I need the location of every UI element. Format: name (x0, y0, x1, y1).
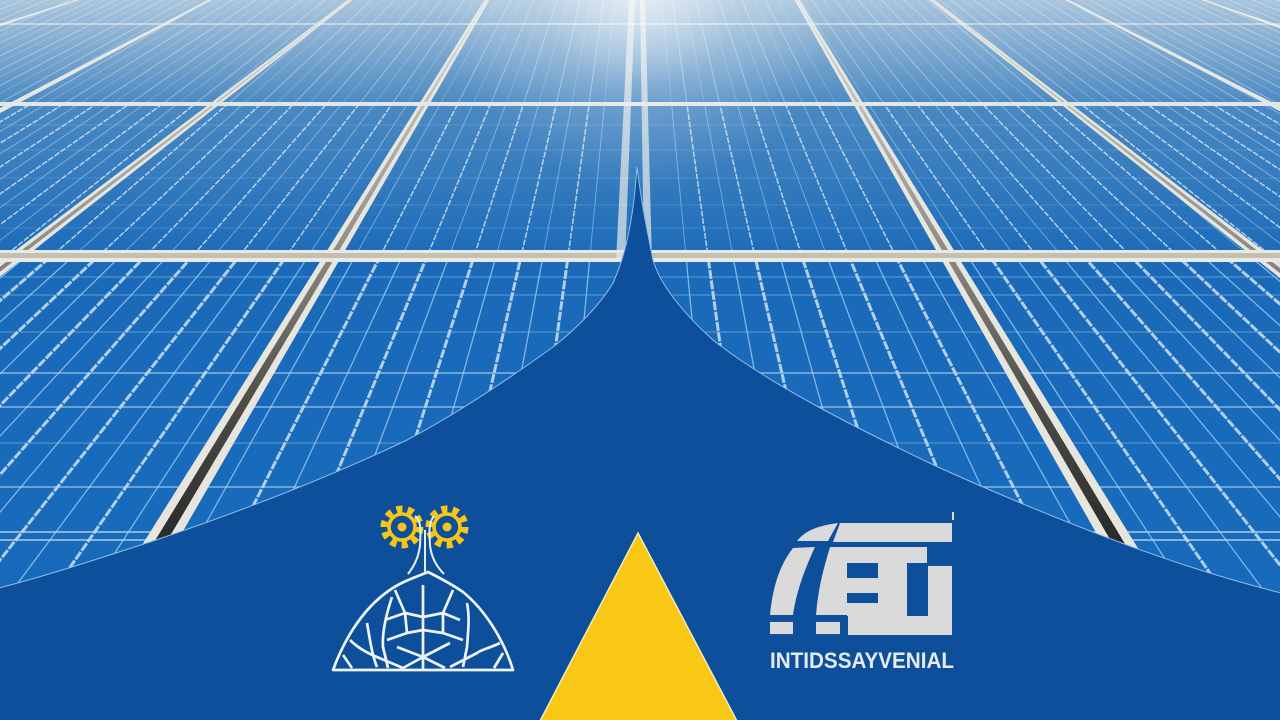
right logo: IEA style mark with wordmark (770, 512, 954, 673)
wordmark: INTIDSSAYVENIAL (770, 648, 954, 673)
icon: right gear (429, 509, 465, 545)
dark blue curved banner (0, 167, 1280, 720)
logo mark (770, 512, 954, 635)
icon: web dome (333, 572, 513, 670)
sky glare over distant panels (0, 0, 1280, 260)
icon: stem (408, 516, 444, 574)
icon: left gear (384, 509, 420, 545)
yellow triangle (540, 533, 737, 720)
left logo: dome with gears (333, 509, 513, 670)
